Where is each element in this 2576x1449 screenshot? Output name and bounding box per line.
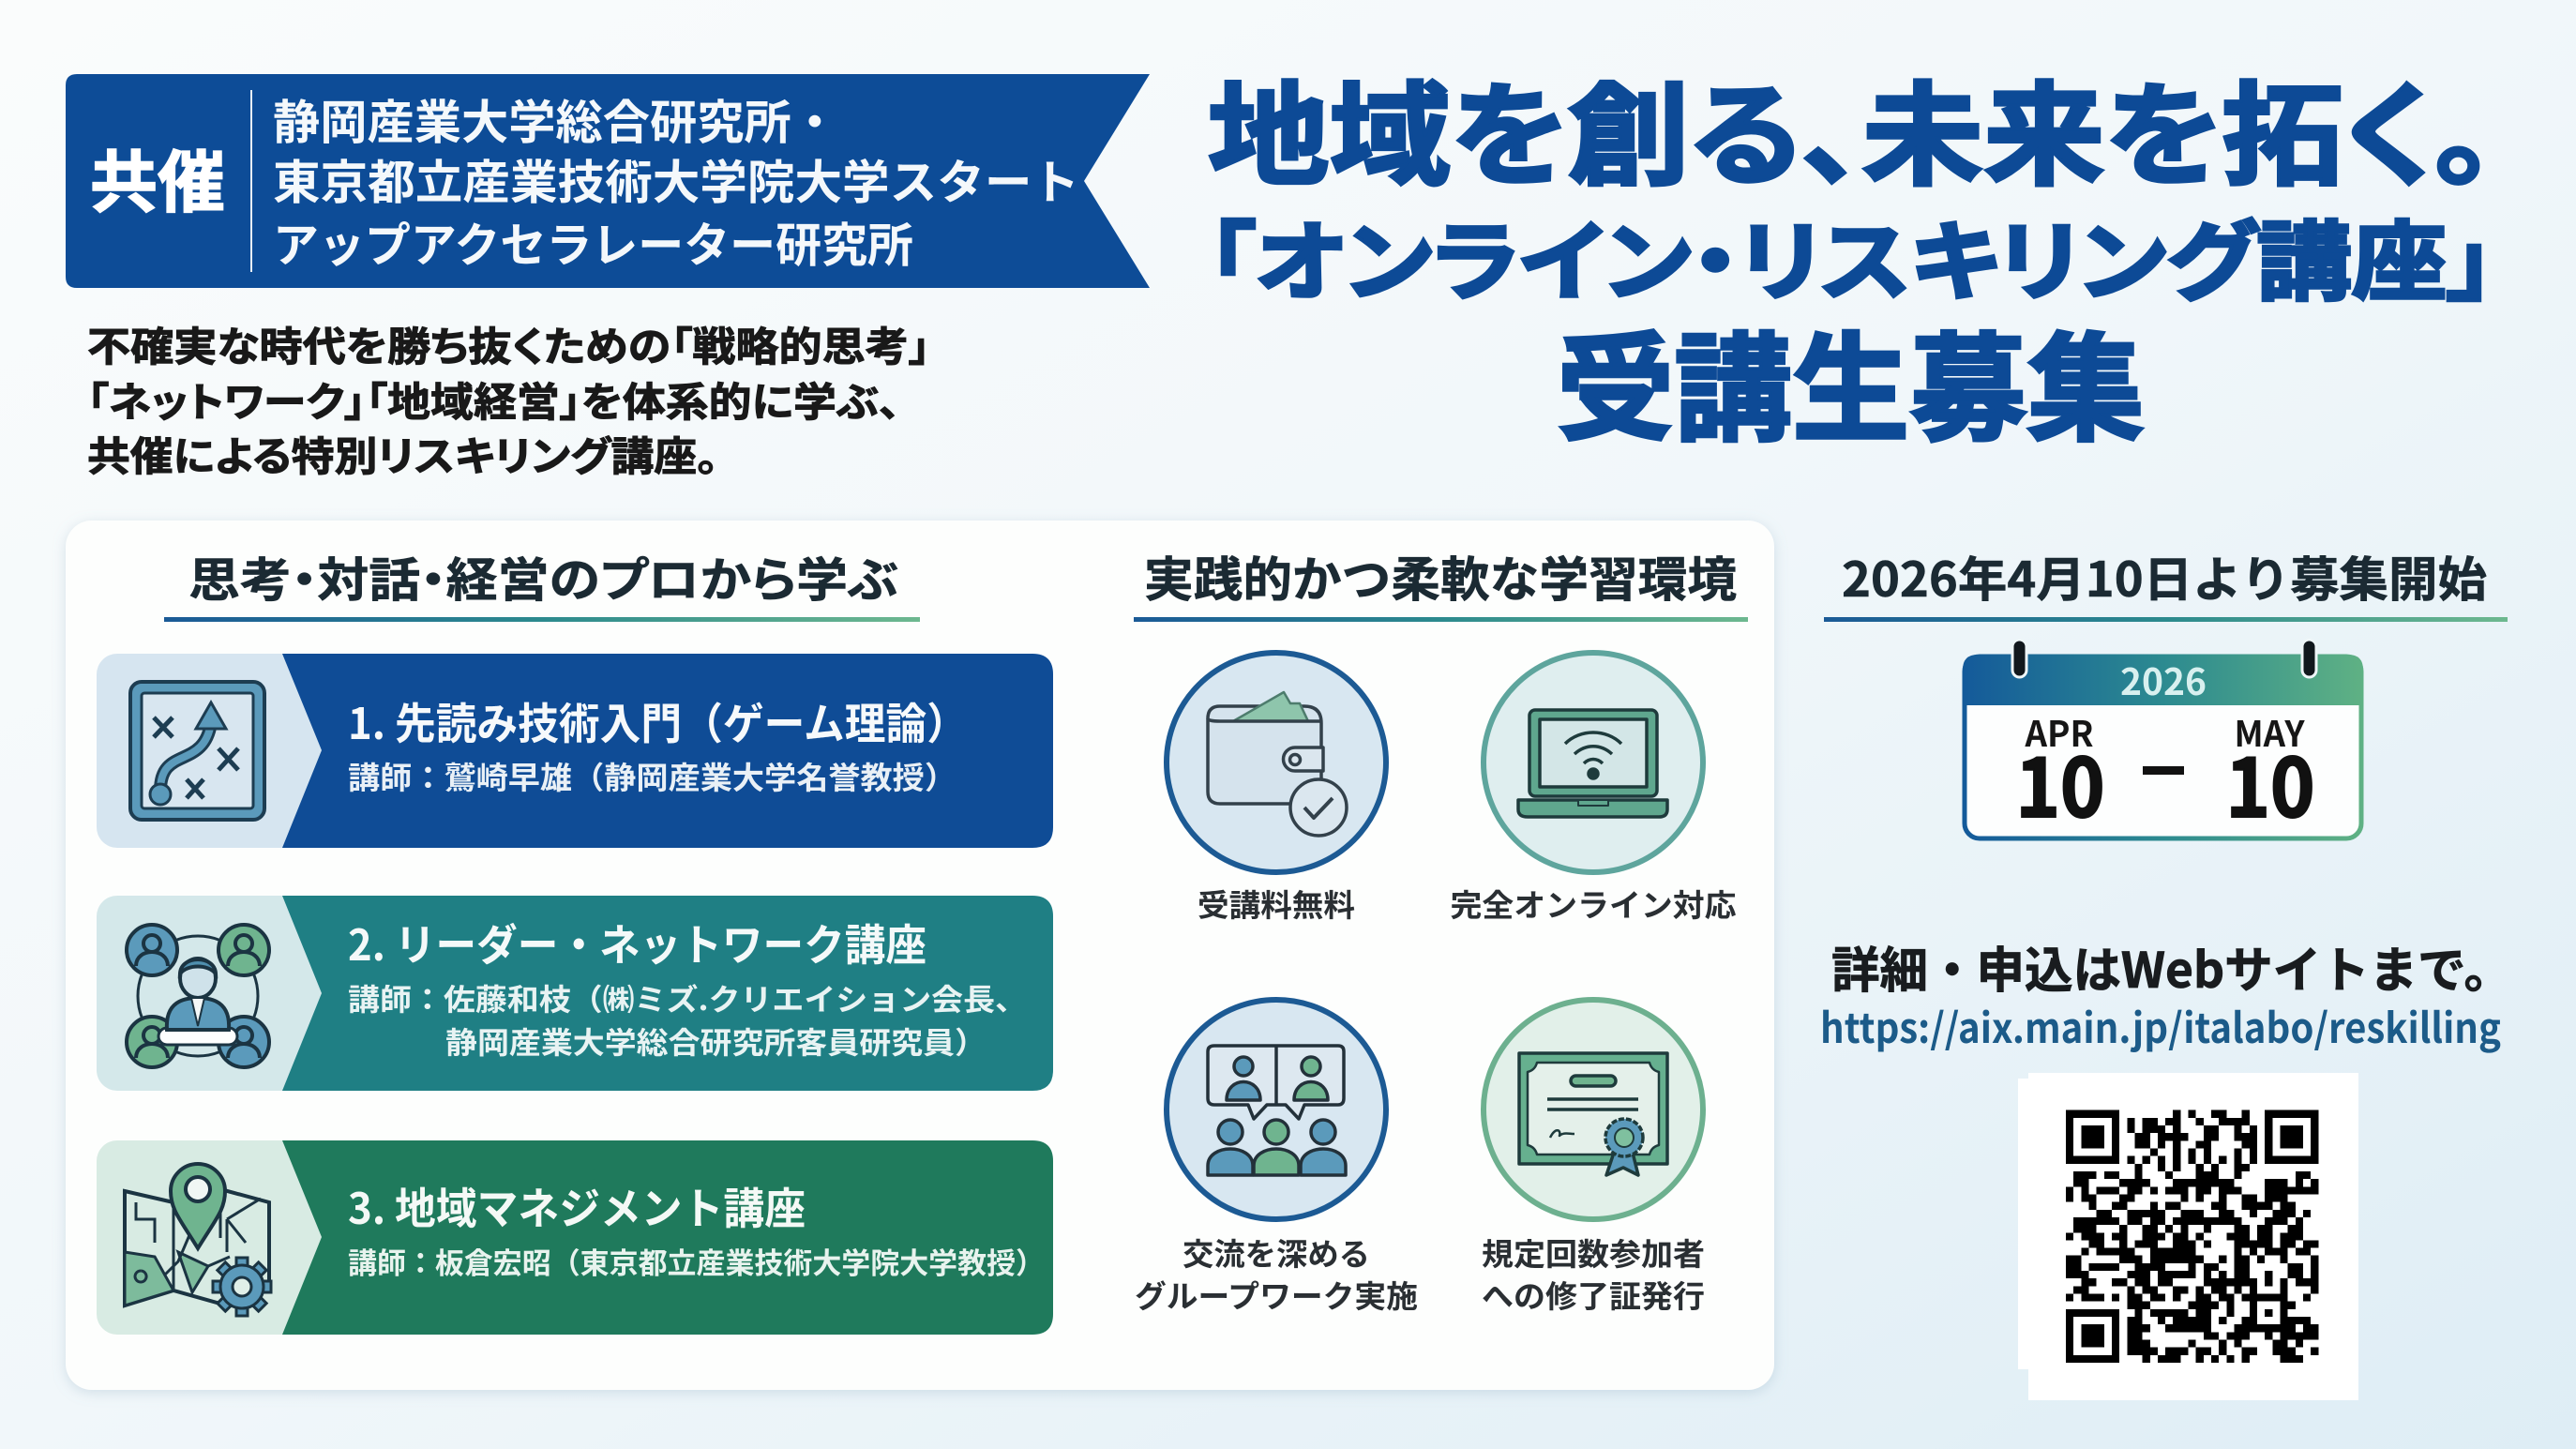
course card 2 [97, 896, 1053, 1091]
main title [1208, 45, 2494, 464]
feature: group work: 交流を深める [1183, 1230, 1370, 1275]
course card 1: 1. 先読み技術入門（ゲーム理論） [348, 690, 968, 752]
main title: 受講生募集 [1557, 294, 2145, 464]
organizer banner [66, 74, 1150, 288]
intro text: 共催による特別リスキリング講座。 [87, 425, 718, 483]
feature: fully online [1450, 653, 1737, 926]
icon: strategy board [130, 682, 264, 820]
calendar: 10 [2226, 723, 2314, 840]
intro text [87, 315, 930, 483]
icon: video group discussion [1167, 1000, 1386, 1219]
feature: certificate: への修了証発行 [1482, 1272, 1705, 1317]
banner organizers text: 静岡産業大学総合研究所・ [273, 85, 838, 153]
course card 3 [97, 1140, 1053, 1335]
feature: group work: グループワーク実施 [1135, 1272, 1418, 1317]
feature: group work [1135, 1000, 1418, 1317]
banner label: co-hosts: 共催 [90, 128, 225, 226]
course card 2: 講師：佐藤和枝（㈱ミズ.クリエイション会長、 [348, 976, 1027, 1019]
icon: leader network [127, 925, 269, 1067]
heading: recruitment start date: 2026年4月10日より募集開始 [1842, 541, 2487, 611]
course card 2: 2. リーダー・ネットワーク講座 [348, 912, 926, 974]
calendar: 2026 [2120, 654, 2207, 706]
icon: wallet [1167, 653, 1386, 872]
heading: learning environment: 実践的かつ柔軟な学習環境 [1144, 541, 1737, 611]
calendar: 10 [2016, 723, 2104, 840]
feature: certificate: 規定回数参加者 [1482, 1230, 1705, 1275]
intro text: 「ネットワーク」「地域経営」を体系的に学ぶ、 [87, 370, 900, 429]
icon: laptop with wifi [1484, 653, 1703, 872]
course card 3: 講師：板倉宏昭（東京都立産業技術大学院大学教授） [348, 1240, 1045, 1282]
calendar: MAY [2234, 705, 2305, 757]
banner organizers text: アップアクセラレーター研究所 [273, 208, 913, 276]
calendar [1963, 640, 2363, 840]
course card 1 [97, 654, 1053, 848]
main title: 「オンライン・リスキリング講座」 [1208, 193, 2494, 318]
course card 2: 静岡産業大学総合研究所客員研究員） [445, 1019, 987, 1063]
feature: fully online: 完全オンライン対応 [1450, 881, 1737, 926]
banner organizers text [273, 85, 1079, 276]
feature: free tuition: 受講料無料 [1198, 881, 1355, 926]
feature: free tuition [1167, 653, 1386, 926]
qr code [2018, 1073, 2358, 1400]
banner organizers text: 東京都立産業技術大学院大学スタート [273, 145, 1079, 213]
web call to action: 詳細・申込はWebサイトまで。 [1831, 931, 2512, 1002]
intro text: 不確実な時代を勝ち抜くための「戦略的思考」 [87, 315, 930, 373]
heading: learn from professionals: 思考・対話・経営のプロから学ぶ [188, 543, 898, 611]
main title: 地域を創る、未来を拓く。 [1208, 45, 2494, 208]
url: https://aix.main.jp/italabo/reskilling [1820, 995, 2501, 1055]
icon: certificate with ribbon [1484, 1000, 1703, 1219]
icon: regional map [125, 1164, 271, 1316]
calendar: APR [2025, 705, 2094, 757]
course card 3: 3. 地域マネジメント講座 [348, 1175, 806, 1237]
panel: course and learning environment [66, 521, 1774, 1390]
course card 1: 講師：鷲崎早雄（静岡産業大学名誉教授） [348, 753, 957, 798]
feature: certificate [1482, 1000, 1705, 1317]
